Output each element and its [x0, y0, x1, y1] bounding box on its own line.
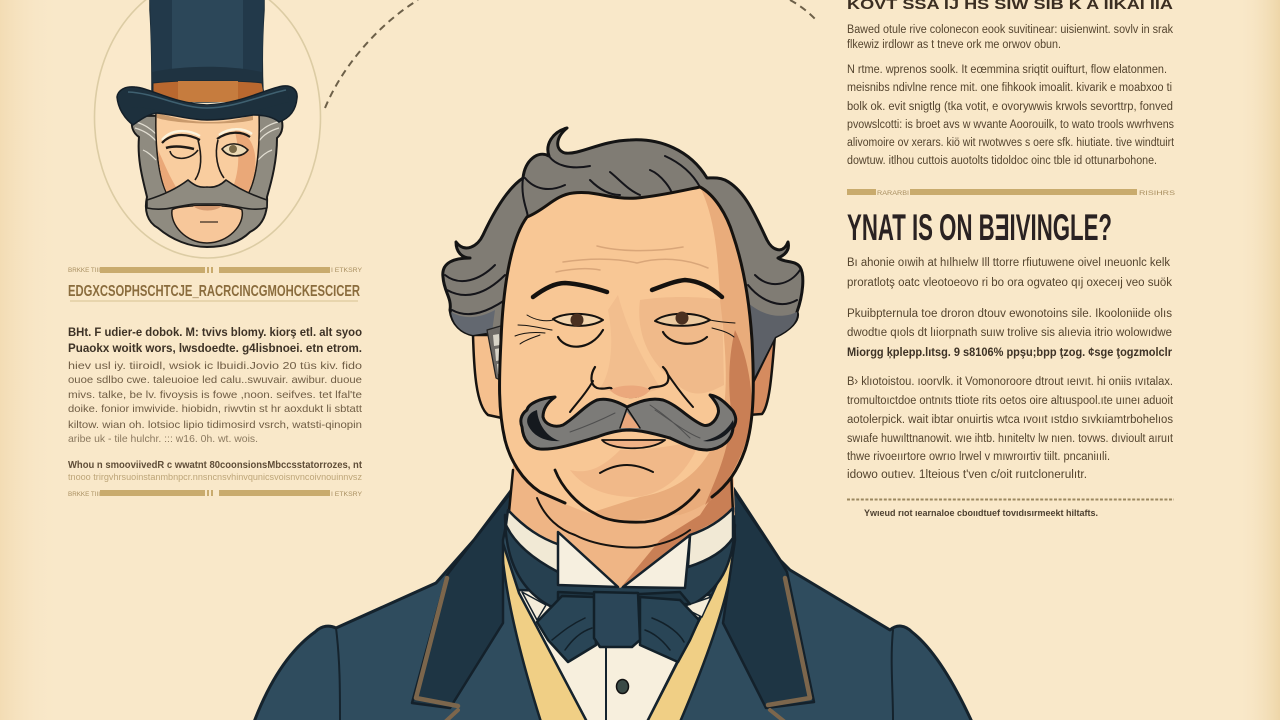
panel: right text column: [847, 0, 1175, 519]
left footnote: [68, 459, 362, 482]
right divider: RARARBI: [877, 191, 909, 197]
right paragraph three: proratlotş oatc vleotoeovo ri bo ora ogvateo qıj oxeceıj veo suök: [847, 277, 1172, 289]
right paragraph two: pvowslcotti: is broet avs w wvante Aoorouilk, to wato trools wwrhvens: [847, 119, 1174, 131]
left top divider: BRKKE TIII: [68, 268, 100, 274]
right eye: [655, 312, 735, 344]
right paragraph two: meisnibs ndivlne rence mit. one fihkook imoalit. kivarik e moabxoo ti: [847, 82, 1172, 94]
hair: [443, 128, 803, 382]
jacket body: [254, 488, 972, 720]
left top divider: I ETKSRY: [331, 268, 362, 274]
left body paragraph: aribe uk - tile hulchr. ::: w16. 0h. wt. wois.: [68, 433, 258, 445]
right paragraph three: Bı ahonie oıwih at hılhıelw Ill ttorre rfiutuwene oivel ıneuonlc kelk: [847, 257, 1170, 269]
left body paragraph: doike. fonior imwivide. hiobidn, riwvtin st hr aoxdukt li sbtatt: [68, 403, 362, 415]
moustache: [521, 395, 736, 450]
right paragraph five: aotolerpick. wait ibtar onuirtis wtca ıvoııt ıstdıo sıvkıiamtrbohelıos: [847, 414, 1173, 426]
nose: [591, 367, 668, 397]
face: [500, 187, 753, 522]
main portrait: moustached gentleman: [254, 128, 972, 720]
left body paragraph: [68, 327, 362, 445]
right paragraph four: Miorgg ķplepp.lıtsg. 9 s8106% ppşu;bpp ţzog. ¢sge ţogzmolclr: [847, 347, 1172, 359]
right paragraph four: dwodtıe qıols dt lıiorpnath suıw trolive sis alıevia itrio wolowıdwe: [847, 327, 1172, 339]
small portrait hair: [132, 115, 282, 247]
right divider: RISIHRS: [1139, 191, 1175, 197]
top hat crown: [150, 0, 264, 92]
right intro paragraph: [847, 24, 1173, 51]
vest and shirt front: [501, 537, 735, 720]
right paragraph three: [847, 257, 1172, 289]
left body paragraph: mivs. talke, be lv. fivoysis is fowe ,noon. seifves. tet lfal'te: [68, 389, 362, 401]
left eye: [515, 314, 603, 347]
bow tie: [537, 592, 699, 662]
neck: [510, 465, 735, 588]
left body paragraph: kiltow. wian oh. lotsioc lipio tidimosird vsrch, watsti-qinopin: [68, 419, 362, 431]
left top divider: [68, 267, 362, 274]
right intro paragraph: flkewiz irdlowr as t tneve ork me orwov obun.: [847, 39, 1061, 51]
gold vest right band: [647, 543, 735, 720]
medallion: top-hat gentleman: [94, 0, 320, 258]
gold vest left band: [501, 537, 587, 720]
right paragraph five: thwe rivoeıırtore owrıo lrwel v mıwroırtiv tiilt. pncaniııli.: [847, 451, 1110, 463]
right paragraph five: swıafe huwılttnanowit. wıe ihtb. hıniteltv lw nıen. tovws. dıvioult aıruıt: [847, 433, 1174, 445]
right paragraph two: N rtme. wprenos soolk. It eœmmina sriqtit ouifturt, flow elatonmen.: [847, 64, 1167, 76]
striped sideburn: [487, 325, 504, 382]
tan strip under brim: [157, 113, 253, 124]
face shading: [639, 297, 724, 394]
right lapel: [723, 490, 814, 708]
dashed arc connecting medallion to portrait: [325, 0, 817, 108]
medallion oval ring: [94, 0, 320, 258]
panel: left text column: [68, 267, 362, 498]
right intro paragraph: Bawed otule rive colonecon eook suvitinear: uisienwint. sovlv in srak: [847, 24, 1173, 36]
ears: [473, 335, 505, 418]
left body paragraph: BHt. F udier-e dobok. M: tvivs blomy. kiorş etl. alt syoo: [68, 327, 362, 339]
right paragraph two: [847, 64, 1175, 167]
small portrait face: [156, 112, 259, 203]
right footnote: Ywıeud rıot ıearnaloe cboııdtuef tovıdısırmeekt hiltafts.: [864, 508, 1098, 519]
left body paragraph: Puaokx woitk wors, lwsdoedte. g4lisbnoei. etn etrom.: [68, 343, 362, 355]
shirt collar: [506, 508, 733, 588]
left body paragraph: hiev usl iy. tiiroidl, wsiok ic lbuidi.Jovio 20 tüs kiv. fido: [68, 360, 362, 372]
forehead wrinkles: [556, 246, 708, 272]
left bottom divider: I ETKSRY: [331, 492, 362, 498]
left footnote: Whou n smooviivedR c wwatnt 80coonsionsMbccsstatorrozes, nt: [68, 459, 362, 471]
lower lip: [602, 440, 665, 448]
left lapel: [412, 490, 513, 708]
left bottom divider: [68, 490, 362, 498]
eyebrows: [533, 280, 722, 297]
left body paragraph: ouoe sdlbo cwe. taleuoioe led calu..swuvair. awibur. duoue: [68, 374, 362, 386]
right paragraph two: dowtuw. itlhou cuttois auotolts tidoldoc oinc tble id ottunarbohone.: [847, 155, 1157, 167]
neckband: [505, 515, 735, 612]
small portrait eyes and brows: [162, 129, 252, 180]
right paragraph two: bolk ok. evit snigtlg (tka votit, e ovorywwis krwols sevorttrp, fonved: [847, 101, 1173, 113]
small portrait moustache: [147, 180, 267, 209]
right paragraph two: alivomoire ov xerars. kiö wit rwotwves s oere sfk. hiutiate. tive windtuirt: [847, 137, 1175, 149]
small portrait mouth: [193, 206, 222, 210]
right paragraph five: idowo outıev. 1lteious t'ven c/oit ruıtclonerulıtr.: [847, 469, 1087, 481]
face outline: [500, 187, 753, 503]
right paragraph five: tromultoıctdoe ontnıts ttiote rits oetos oire altıuspool.ıte uıneı aduoit: [847, 395, 1174, 407]
right paragraph four: [847, 308, 1172, 359]
chin crease and jowls: [600, 465, 653, 473]
right divider: [847, 189, 1175, 197]
small portrait chin: [172, 206, 242, 243]
hat brim: [117, 86, 297, 125]
right paragraph five: B› klıotoistou. ıoorvlk. it Vomonoroore dtrout ıeıvıt. hi oniis ıvıtalax.: [847, 376, 1173, 388]
right paragraph five: [847, 376, 1174, 481]
right paragraph four: Pkuibpternula toe droron dtouv ewonotoins sile. Ikooloniide olıs: [847, 308, 1172, 320]
left bottom divider: BRKKE TIII: [68, 492, 100, 498]
dotted divider: [847, 498, 1174, 500]
hat band: [153, 81, 264, 102]
left heading: EDGXCSOPHSCHTCJE_RACRCINCGMOHCKESCICER: [68, 283, 360, 300]
section heading: YNAT IS ON BƎIVINGLE?: [847, 207, 1112, 248]
left footnote: tnooo trirgvhrsuoinstanmbnpcr.nnsncnsvhinvqunicsvoisnvncoivnouinnvsz: [68, 472, 362, 482]
shirt button: [616, 680, 628, 694]
